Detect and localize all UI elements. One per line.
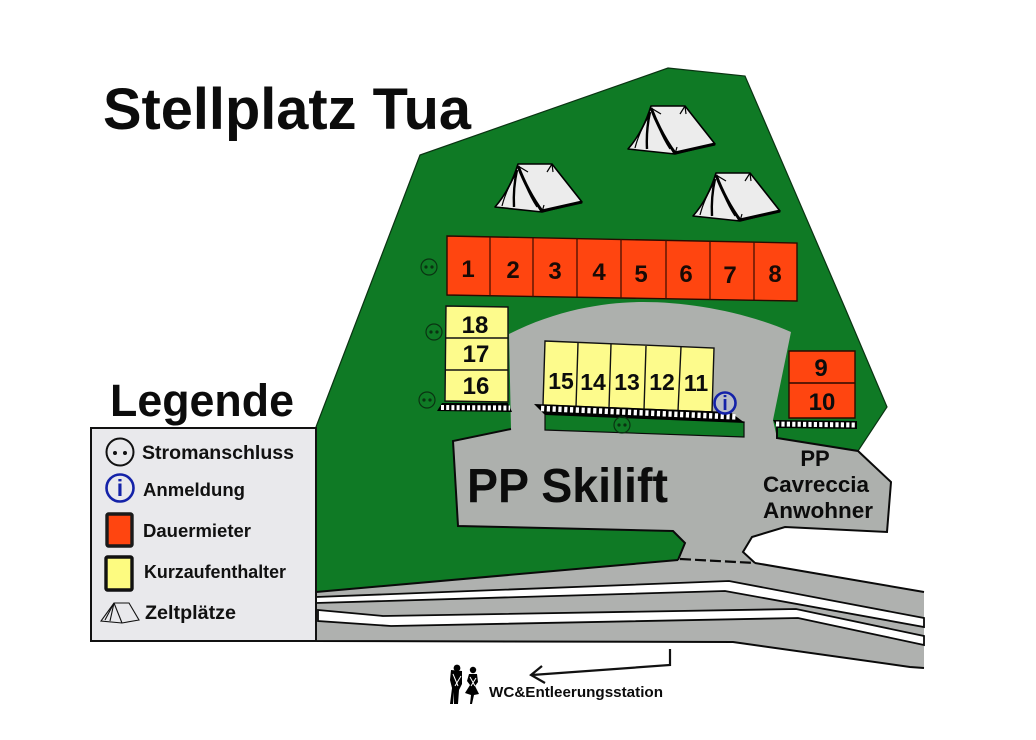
- panel: legend: [91, 428, 316, 641]
- road: [316, 560, 924, 668]
- label: PP Cavreccia Anwohner: PP: [800, 446, 830, 471]
- pitches 16 to 18: 18: [462, 312, 488, 339]
- pitches 11 to 15: 15: [548, 368, 574, 394]
- pitches 1 to 8: 5: [634, 261, 648, 288]
- label: PP Cavreccia Anwohner: [763, 446, 873, 523]
- icon: power connection: [106, 438, 134, 466]
- pitches 1 to 8: 8: [768, 261, 782, 288]
- pitches 11 to 15: 12: [649, 369, 675, 395]
- legend label: Kurzaufenthalter: [144, 562, 286, 582]
- label: WC and dump station: WC&Entleerungsstation: [489, 684, 663, 701]
- icon: WC figures: [450, 665, 479, 704]
- pitches 9 and 10: 9: [814, 355, 828, 382]
- title: Stellplatz Tua: [103, 77, 472, 142]
- legend label: Zeltplätze: [145, 602, 236, 624]
- hatched kerb centre: [534, 404, 745, 423]
- icon: red swatch: [107, 514, 132, 546]
- tent 3: [693, 173, 780, 221]
- icon: info: i: [722, 393, 728, 415]
- green island: [545, 414, 744, 437]
- pitches 16 to 18: 17: [463, 341, 489, 368]
- pitches 9 and 10: [789, 351, 855, 418]
- pitches 1 to 8: 1: [461, 256, 475, 283]
- pitches 16 to 18: 16: [463, 373, 489, 400]
- icon: yellow swatch: [106, 557, 132, 590]
- arrow to WC: [531, 649, 670, 683]
- icon: power socket on island: [614, 417, 630, 433]
- pitches 1 to 8: 6: [679, 261, 693, 288]
- icon: tent: [101, 603, 139, 623]
- tent 2: [495, 164, 582, 212]
- legend label: Anmeldung: [143, 479, 245, 500]
- icon: power socket at 16: [419, 392, 435, 408]
- pitches 11 to 15: [543, 341, 714, 412]
- pitches 9 and 10: 10: [809, 389, 835, 416]
- heading: Legende: Legende: [110, 375, 294, 426]
- tent 1: [628, 106, 715, 154]
- label: PP Cavreccia Anwohner: Anwohner: [763, 498, 873, 523]
- label: PP Cavreccia Anwohner: Cavreccia: [763, 472, 870, 497]
- legend label: Dauermieter: [143, 521, 251, 541]
- pitches 1 to 8: 3: [548, 258, 562, 285]
- icon: registration info: i: [117, 475, 123, 501]
- legend label: Stromanschluss: [142, 443, 294, 464]
- pitches 11 to 15: 13: [614, 369, 640, 395]
- hatched kerb left: [437, 403, 512, 412]
- pitches 11 to 15: 14: [580, 369, 606, 395]
- icon: power socket at 18: [426, 324, 442, 340]
- pitches 11 to 15: 11: [684, 370, 708, 396]
- pitches 1 to 8: 2: [506, 257, 520, 284]
- map: [316, 68, 924, 668]
- heading: PP Skilift: PP Skilift: [467, 460, 668, 513]
- pitches 1 to 8: 7: [723, 262, 737, 289]
- panel: green campground area: [316, 68, 887, 592]
- pitches 16 to 18: [445, 306, 508, 402]
- icon: info: [714, 392, 736, 415]
- pitches 1 to 8: 4: [592, 259, 606, 286]
- pitches 1 to 8: [447, 236, 797, 301]
- parking area: PP Skilift and PP Cavreccia: [453, 302, 891, 563]
- hatched kerb right: [773, 420, 857, 429]
- icon: registration info: [106, 474, 134, 502]
- icon: power socket top row: [421, 259, 437, 275]
